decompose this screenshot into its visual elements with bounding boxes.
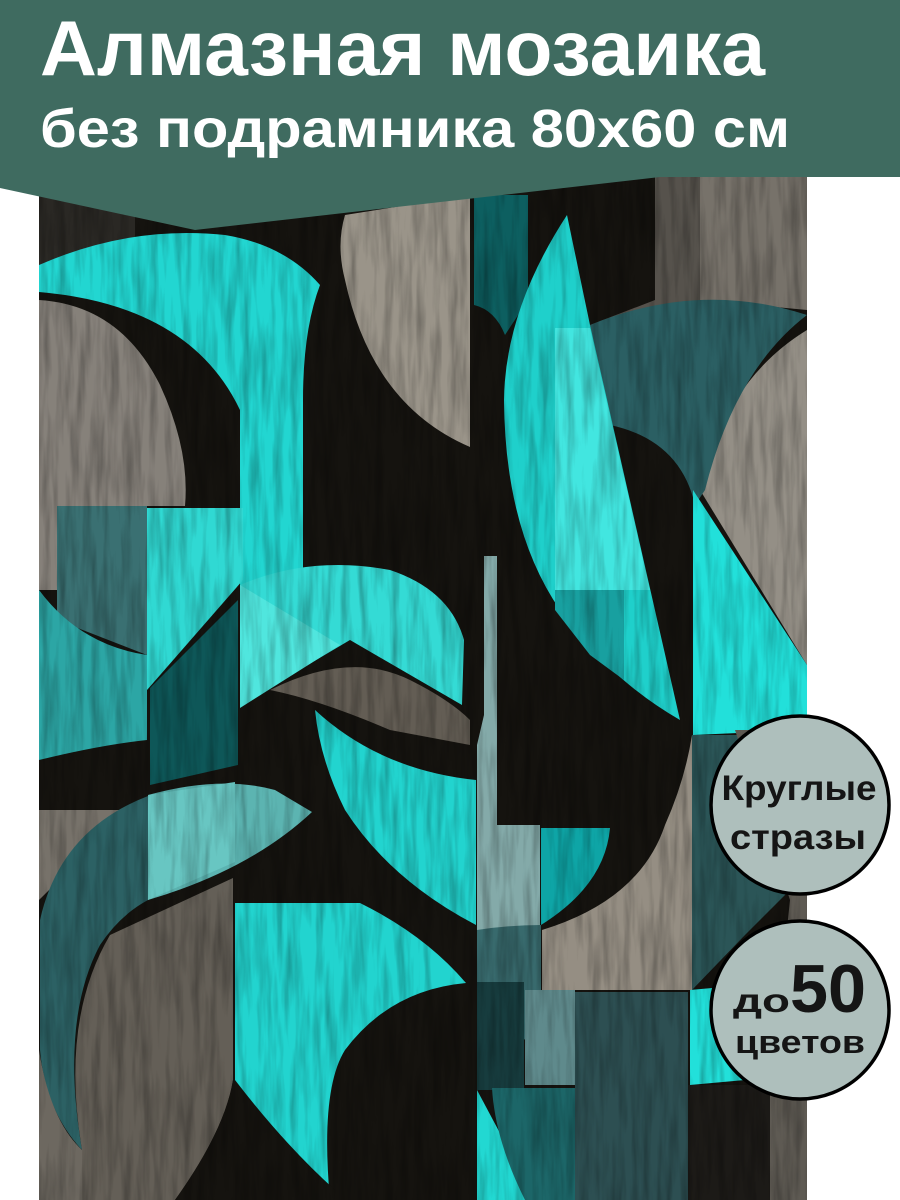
badge number: 50: 50 (790, 951, 866, 1027)
teal stripe: top centre (474, 195, 528, 335)
cyan sliver: bottom centre (477, 1090, 525, 1200)
cyan square: left (147, 508, 243, 690)
teal panel: right lower (692, 735, 790, 990)
wood panel: left half circle (39, 300, 186, 590)
title: line two: без подрамника 80х60 см (40, 99, 790, 159)
banner: green header (0, 0, 900, 230)
cyan wedge: right lower (690, 985, 745, 1085)
wood panel: right lower (735, 730, 807, 1200)
wood panel: right side (700, 330, 807, 665)
wood swirl: centre (270, 667, 470, 745)
cyan crescent: centre (315, 710, 476, 925)
badge: up to 50 colours (711, 921, 889, 1099)
dark teal block: left middle (150, 600, 238, 785)
wood panel: centre bottom right (542, 735, 692, 990)
cyan fan: centre (240, 565, 464, 705)
artwork: abstract geometric mosaic picture (39, 177, 807, 1200)
cyan blade: centre right (504, 215, 680, 720)
grey vertical bar: centre (477, 556, 540, 930)
badge text: line one: Круглые (722, 769, 876, 808)
wood panel: top left strip (39, 195, 135, 265)
badge text: цветов: цветов (735, 1024, 865, 1060)
teal crescent: left middle (39, 590, 147, 760)
dark teal block: bottom (575, 992, 688, 1200)
cyan panel: bottom left (235, 903, 466, 1200)
teal square: left (57, 506, 147, 655)
badge text: line two: стразы (730, 818, 866, 857)
wood grain overlay (39, 177, 807, 1200)
teal block under rectangle (555, 590, 624, 680)
black arc: bottom left (175, 1080, 335, 1200)
teal square: centre bottom (541, 828, 610, 925)
title: line one: Алмазная мозаика (40, 4, 766, 92)
wood panel: bottom left corner (39, 1050, 82, 1200)
badge text: до: до (733, 982, 790, 1019)
teal crescent: lower left (40, 796, 148, 1150)
wood panel: lower left (39, 810, 118, 900)
teal crest: top right (590, 300, 807, 505)
cyan arc: top left (39, 233, 320, 585)
teal block: bottom centre (477, 925, 541, 1040)
cyan fan: lower left (148, 784, 312, 900)
wood panel: top right (590, 177, 700, 325)
cyan panel: right (693, 490, 807, 735)
wood panel: top centre half circle (340, 195, 470, 447)
small teal square: bottom centre (477, 982, 524, 1090)
black panel: bottom right (688, 1085, 770, 1200)
cyan rectangle: centre right (555, 328, 650, 590)
badge: round rhinestones (711, 716, 889, 894)
wood panel: bottom left (75, 878, 233, 1200)
